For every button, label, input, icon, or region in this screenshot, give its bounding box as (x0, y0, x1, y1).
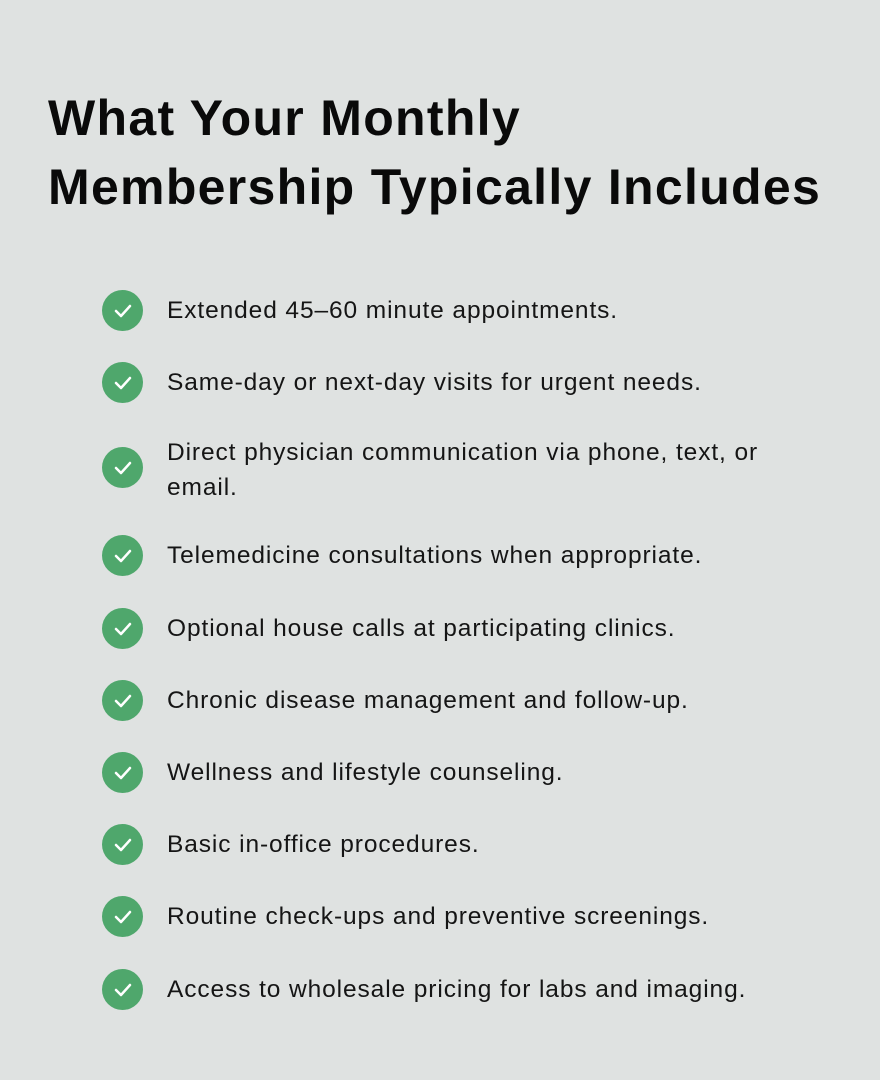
item 3 (102, 439, 758, 501)
title (48, 90, 821, 215)
item 10 (102, 969, 746, 1010)
text: Same-day or next-day visits for urgent needs. (167, 369, 702, 396)
item 1 (102, 290, 618, 331)
text: Chronic disease management and follow-up. (167, 687, 689, 714)
title: What Your Monthly (48, 90, 521, 146)
item 4 (102, 535, 702, 576)
item 2 (102, 362, 702, 403)
text: Optional house calls at participating clinics. (167, 615, 676, 642)
text: Routine check-ups and preventive screenings. (167, 903, 709, 930)
text: Wellness and lifestyle counseling. (167, 759, 564, 786)
item 5 (102, 608, 676, 649)
text: Extended 45–60 minute appointments. (167, 297, 618, 324)
title: Membership Typically Includes (48, 159, 821, 215)
item 9 (102, 896, 709, 937)
item 7 (102, 752, 564, 793)
item 8 (102, 824, 480, 865)
text: Telemedicine consultations when appropriate. (167, 542, 702, 569)
item 6 (102, 680, 689, 721)
text: Direct physician communication via phone, text, or email. (167, 439, 758, 501)
text: Access to wholesale pricing for labs and imaging. (167, 976, 746, 1003)
text: Basic in-office procedures. (167, 831, 480, 858)
